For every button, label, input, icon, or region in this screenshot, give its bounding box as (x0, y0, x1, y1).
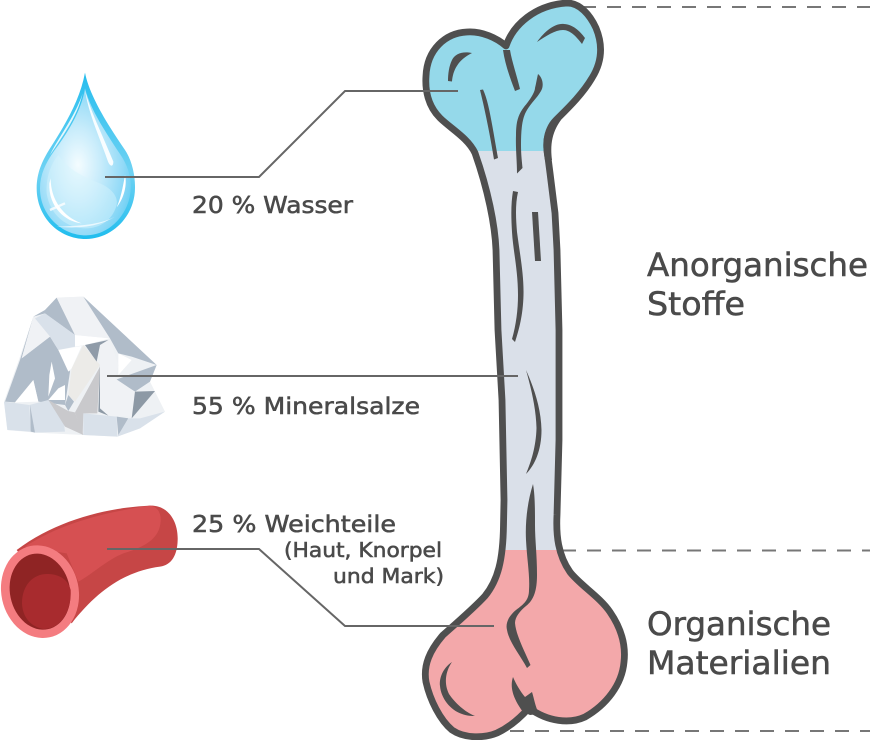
bone fill: pink lower head (428, 550, 621, 734)
leader line: mineral salts (107, 375, 518, 377)
icon: water drop (37, 73, 135, 239)
heading: organic materials: Materialien (647, 644, 831, 682)
crystal warm facets (65, 395, 74, 411)
heading: inorganic substances: Stoffe (647, 285, 745, 323)
icon: mineral salt crystal (4, 297, 165, 437)
heading: inorganic substances: Anorganische (647, 246, 868, 284)
label: soft tissue: 25 % Weichteile (192, 512, 396, 538)
vessel inner dark (3, 548, 77, 635)
drop outer rim (37, 73, 135, 239)
dashed guide: middle (537, 550, 870, 552)
heading: organic materials: Organische (647, 605, 831, 643)
vessel ring (0, 538, 88, 645)
bone outline (425, 3, 624, 737)
heading: inorganic substances (647, 246, 868, 323)
drop body (40, 88, 131, 235)
dashed guide: bottom (510, 730, 870, 732)
icon: blood vessel tube (0, 506, 178, 645)
label: mineral salts: 55 % Mineralsalze (192, 394, 420, 420)
crystal base silhouette (4, 297, 165, 437)
drop highlights (85, 90, 113, 166)
heading: organic materials (647, 605, 831, 682)
vessel outer tube (17, 506, 178, 623)
bone fill: grey shaft (478, 151, 556, 550)
bone inner marks (440, 24, 585, 716)
leader line: soft tissue (107, 549, 494, 626)
crystal facets (5, 297, 157, 436)
bone fill: blue upper head (429, 6, 598, 151)
bone illustration (422, 0, 628, 740)
label detail line 2: und Mark) (333, 564, 444, 588)
leader line: water (105, 91, 458, 177)
drop wave shading (47, 155, 117, 228)
crystal light facets (15, 335, 132, 402)
label: water: 20 % Wasser (192, 193, 354, 219)
label detail line 1: (Haut, Knorpel (284, 538, 442, 562)
vessel inner back wall (22, 574, 71, 629)
label: soft tissue (192, 512, 444, 588)
dashed guide: top (582, 6, 870, 8)
vessel light face (25, 506, 161, 582)
